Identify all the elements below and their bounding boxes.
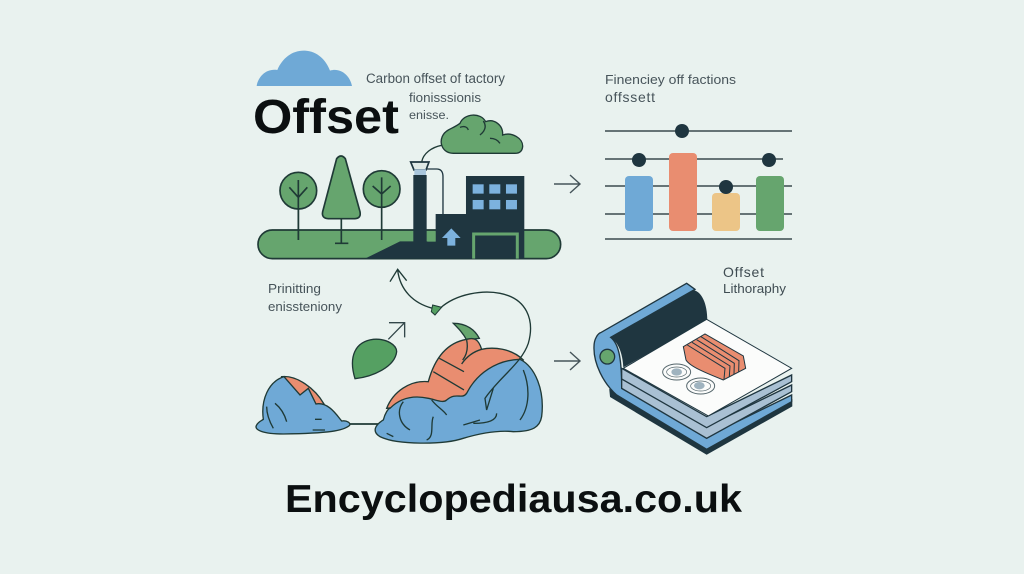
smoke line xyxy=(422,145,442,162)
salmon block xyxy=(683,334,746,380)
large blob xyxy=(375,323,542,443)
arrow: factory to chart xyxy=(554,175,580,193)
ground strip xyxy=(258,230,561,259)
text block: offset lithography label xyxy=(723,264,787,296)
arrow: blobs to book xyxy=(554,352,580,370)
text block: carbon offset caption xyxy=(366,71,505,122)
white page xyxy=(623,319,792,416)
gray layer upper xyxy=(622,368,792,428)
text block: carbon offset caption: enisse. xyxy=(409,110,449,122)
base dark layer xyxy=(610,390,792,454)
illustration: trees and factory on ground xyxy=(258,115,561,259)
stem leaf xyxy=(453,323,479,340)
roller dark surface xyxy=(610,290,707,367)
tree: right round xyxy=(363,171,400,240)
green cloud xyxy=(441,115,523,153)
text block: carbon offset caption: fionisssionis xyxy=(409,91,481,105)
footer site name: Encyclopediausa.co.uk xyxy=(285,478,742,521)
title: Offset: Offset xyxy=(253,91,399,144)
text block: printing caption: enissteniony xyxy=(268,299,342,314)
chart: bars with markers xyxy=(605,124,792,239)
green roller end xyxy=(600,349,615,364)
illustration: printing blobs, leaf, and curved arrows xyxy=(256,269,542,443)
text block: financing caption: offssett xyxy=(605,89,655,105)
gray layer lower xyxy=(622,378,792,438)
bar: red xyxy=(669,153,697,231)
door xyxy=(474,234,517,259)
text block: offset lithography label: Lithoraphy xyxy=(723,281,787,296)
illustration: offset lithography book and roller xyxy=(594,283,792,454)
icon: blue cloud xyxy=(257,51,352,86)
text block: printing caption xyxy=(268,281,342,314)
leaf icon xyxy=(352,323,405,379)
chimney cap xyxy=(411,162,429,170)
text block: offset lithography label: Offset xyxy=(723,264,764,280)
text block: financing caption: Finenciey off factions xyxy=(605,72,737,87)
windows xyxy=(473,184,517,209)
bar: blue xyxy=(625,176,653,231)
small blob xyxy=(256,377,350,434)
factory xyxy=(365,162,524,259)
curved arrow xyxy=(390,269,433,308)
bar: green xyxy=(756,176,784,231)
blue spine and layer xyxy=(594,283,792,449)
pipe xyxy=(427,169,443,214)
tree: triangular xyxy=(322,156,360,243)
text block: carbon offset caption: Carbon offset of tactory xyxy=(366,71,505,86)
connector line xyxy=(348,421,382,426)
registration mark 2 xyxy=(687,378,715,394)
text block: financing caption xyxy=(605,72,737,105)
bar: yellow xyxy=(712,193,740,231)
registration mark 1 xyxy=(663,364,691,380)
tree: left round xyxy=(280,172,317,240)
text block: printing caption: Prinitting xyxy=(268,281,321,296)
up arrow xyxy=(442,228,461,246)
